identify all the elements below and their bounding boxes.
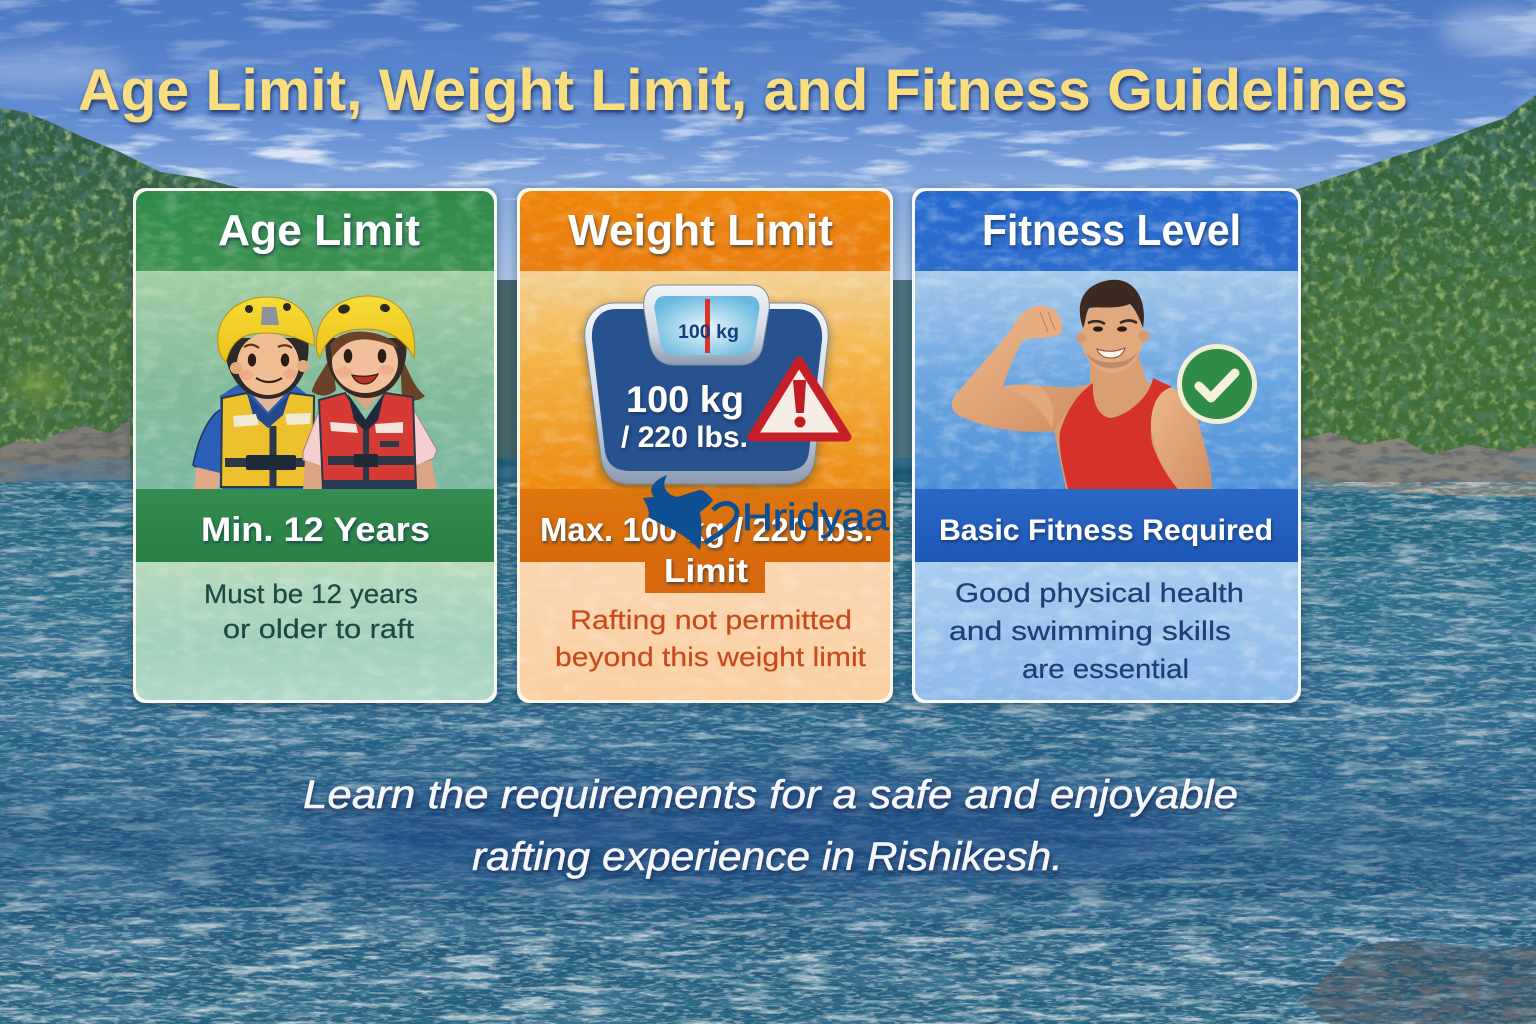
head [1081,299,1143,373]
icon: green check badge [1177,344,1257,424]
value band: minimum age [136,489,494,562]
scale dial reading: 100 kg [678,322,739,343]
value band: basic fitness [915,489,1298,562]
value band: minimum age: Min. 12 Years [201,511,430,549]
description: fitness [949,578,1244,684]
boy [193,297,316,489]
panel body: fitness image area [915,270,1298,490]
value band: maximum weight: Max. 100 kg / 220 lbs. [540,511,873,548]
face [1088,320,1137,324]
background: sky [0,0,1536,300]
texture overlay [136,191,494,700]
texture overlay [520,191,890,700]
value band: maximum weight: Limit [664,552,748,589]
fist [1012,306,1062,339]
scale reading: 100 kg [626,379,744,420]
texture overlay [915,191,1298,700]
tagline: rafting experience in Rishikesh. [472,835,1063,879]
hair [1080,280,1144,328]
panel body: weight limit image area [520,270,890,490]
title: Age Limit, Weight Limit, and Fitness Guidelines [78,58,1408,123]
heading: weight limit: Weight Limit [568,206,833,255]
panel lower section: fitness [915,561,1298,700]
panel lower section: age limit [136,561,494,700]
description: fitness: Good physical health [955,578,1244,608]
stubble [1086,350,1138,368]
panel: weight limit [517,188,893,703]
description: weight limit: beyond this weight limit [555,642,867,672]
heading: age limit: Age Limit [218,206,420,255]
right shoulder and arm [1150,386,1212,489]
red tank top [1059,378,1178,489]
panel body: age limit image area [136,270,494,490]
header band: fitness [915,191,1298,271]
flexed arm [952,326,1084,432]
icon: warning triangle [752,361,847,437]
watermark: Hridyaa logo [643,475,890,550]
description: fitness: are essential [1022,654,1189,684]
tagline: Learn the requirements for a safe and enjoyable [303,773,1238,817]
illustration: smiling man flexing [952,280,1257,489]
value band: basic fitness: Basic Fitness Required [939,514,1273,547]
background: river water [0,458,1536,1024]
watermark: Hridyaa logo: Hridyaa [742,497,890,539]
neck and chest [1054,352,1180,489]
panel: age limit [133,188,497,703]
illustration: two children in helmets and life vests [193,296,437,489]
description: weight limit: Rafting not permitted [570,605,852,635]
background: forested hills [0,90,1536,505]
panel: fitness level [912,188,1301,703]
description: age limit: or older to raft [223,614,415,644]
icon: bathroom scale [585,285,828,484]
tagline [303,773,1238,879]
panel lower section: weight limit [520,561,890,700]
girl [303,296,437,489]
description: fitness: and swimming skills [949,616,1231,646]
description: weight limit [555,605,867,672]
header band: weight limit [520,191,890,271]
icon: bathroom scale: / 220 lbs. [621,421,748,454]
header band: age limit [136,191,494,271]
heading: fitness: Fitness Level [982,206,1241,255]
description: age limit: Must be 12 years [204,579,418,609]
description: age limit [204,579,418,644]
value band: maximum weight [520,489,890,593]
